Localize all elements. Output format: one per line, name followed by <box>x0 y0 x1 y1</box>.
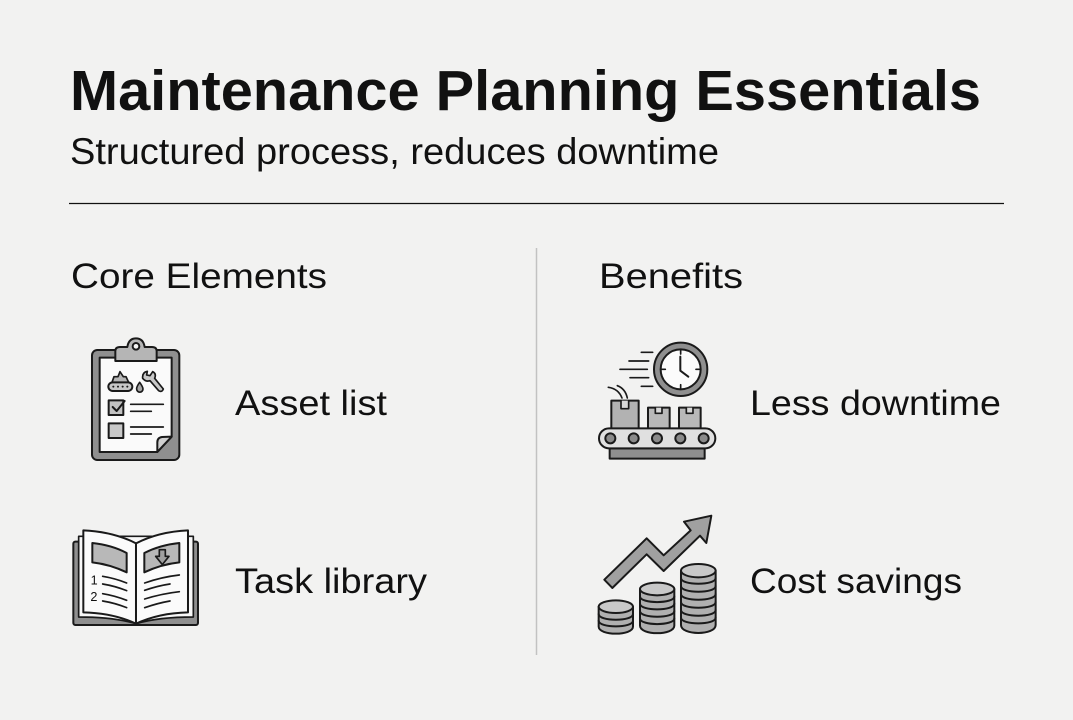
icon: clipboard <box>92 338 179 460</box>
heading: benefits: Benefits <box>599 256 743 296</box>
label: cost savings: Cost savings <box>750 561 962 601</box>
numbers: 2 <box>90 590 97 604</box>
numbers: 1 <box>91 573 98 587</box>
label: less downtime: Less downtime <box>750 383 1001 423</box>
heading: core elements: Core Elements <box>71 256 327 296</box>
numbers <box>90 573 98 604</box>
icon: open book <box>73 530 198 625</box>
label: task library: Task library <box>235 561 427 601</box>
label: asset list: Asset list <box>235 383 387 423</box>
icon: conveyor and clock <box>599 343 715 459</box>
subtitle: Structured process, reduces downtime <box>70 131 719 172</box>
icon: coins and rising arrow <box>599 516 716 634</box>
title: Maintenance Planning Essentials <box>70 59 981 123</box>
